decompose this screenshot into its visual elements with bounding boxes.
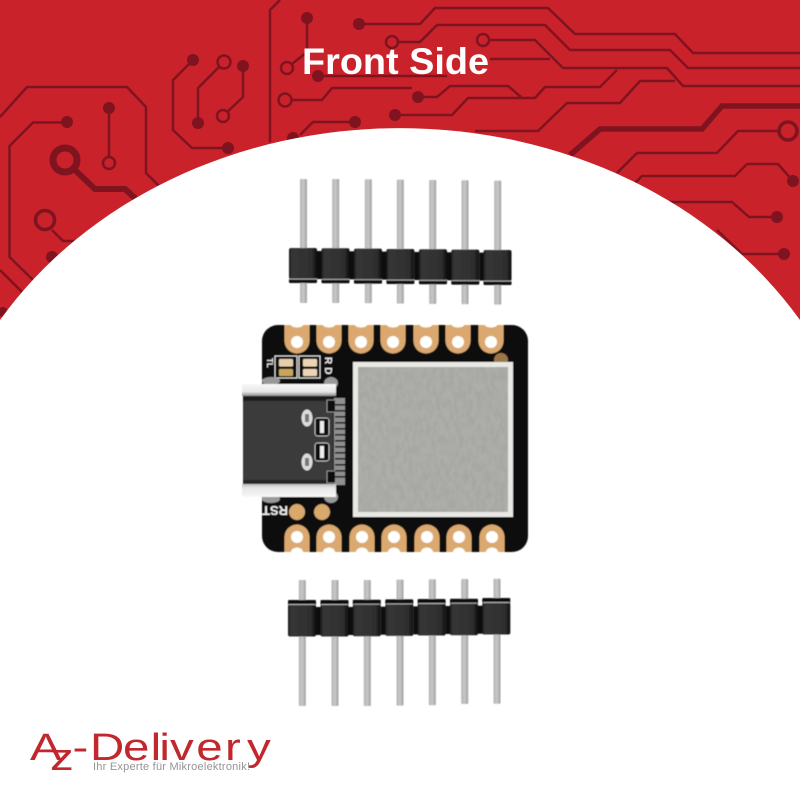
logo wordmark: Az-Delivery [30, 726, 271, 779]
status LEDs [275, 356, 320, 378]
circuit traces [0, 0, 800, 292]
PCB [262, 325, 528, 552]
reset label: RST [262, 503, 288, 518]
circuit nodes: solid dots [0, 12, 799, 317]
title: Front Side [302, 40, 489, 82]
bottom solder pads [284, 524, 504, 552]
microcontroller board [242, 325, 528, 552]
circuit nodes: rings [36, 34, 797, 230]
RD silkscreen label: RD [322, 357, 333, 377]
TL silkscreen label: TL [265, 358, 274, 368]
header housing [288, 598, 510, 636]
red circuit banner [0, 0, 800, 330]
logo [30, 726, 271, 779]
header housing [289, 248, 512, 285]
USB-C connector [242, 377, 345, 503]
top solder pads [284, 325, 504, 354]
header pins [299, 579, 500, 706]
logo tagline: Ihr Experte für Mikroelektronik! [93, 761, 250, 773]
header pins [300, 179, 501, 305]
reset pads [289, 504, 330, 520]
top pin header [289, 179, 512, 305]
metal shield [353, 353, 513, 517]
bottom pin header [288, 579, 510, 706]
